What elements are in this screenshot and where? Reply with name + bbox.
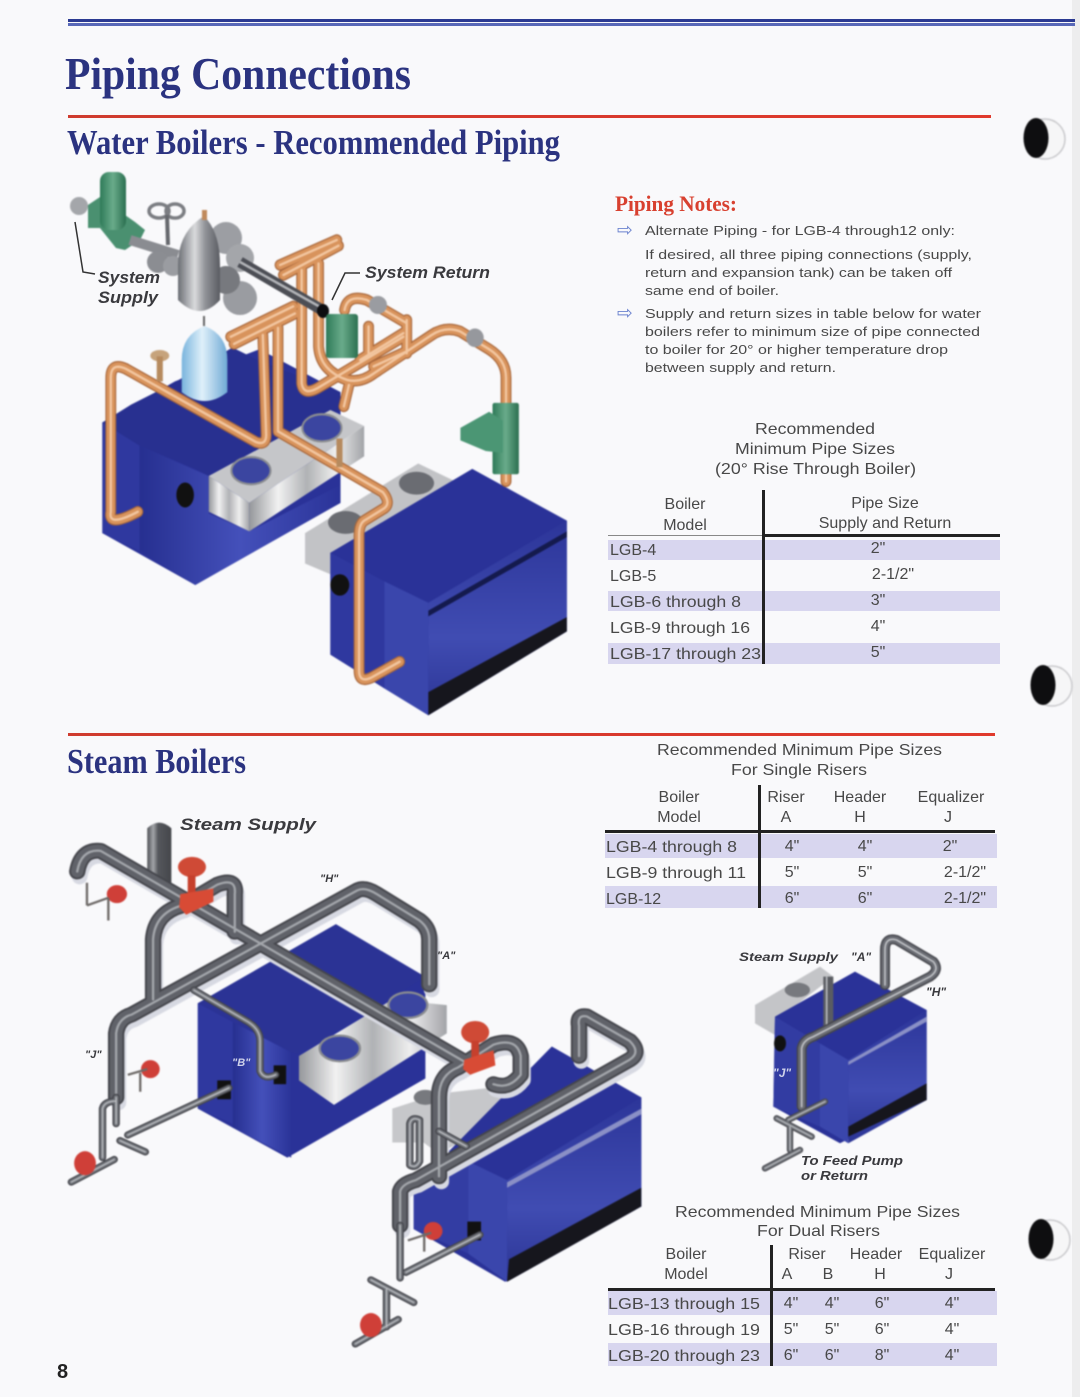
label: H small: "H" xyxy=(926,985,946,999)
table: dual risers: 6" xyxy=(825,1347,839,1364)
note 2: ⇨ xyxy=(617,302,633,324)
table: dual risers: 4" xyxy=(784,1295,798,1312)
table: dual risers: LGB-13 through 15 xyxy=(608,1296,760,1313)
table: single risers: LGB-4 through 8 xyxy=(606,839,737,856)
table: single risers: LGB-12 xyxy=(606,891,661,908)
table: water boilers pipe sizes: 5" xyxy=(871,644,885,661)
label: to feed pump: or Return xyxy=(801,1169,868,1183)
boiler 1 xyxy=(102,347,341,585)
red valve 2 xyxy=(461,1021,495,1075)
table: single risers: 4" xyxy=(858,838,872,855)
table: water boilers pipe sizes: LGB-9 through 16 xyxy=(610,620,750,637)
table: single risers: Riser xyxy=(767,789,805,806)
silver block xyxy=(755,967,833,1035)
red controls xyxy=(74,883,443,1337)
table: water boilers pipe sizes: 2-1/2" xyxy=(872,566,914,583)
table: single risers: 6" xyxy=(785,890,799,907)
table: water boilers pipe sizes: Recommended xyxy=(755,421,875,438)
note 1: If desired, all three piping connections (supply, xyxy=(645,247,972,262)
table: water boilers pipe sizes: Pipe Size xyxy=(851,495,919,512)
callout: system return: System Return xyxy=(365,263,490,282)
table: dual risers: LGB-20 through 23 xyxy=(608,1348,760,1365)
supply side fittings xyxy=(130,204,184,276)
table: dual risers: 6" xyxy=(784,1347,798,1364)
boiler B xyxy=(392,1047,641,1282)
steel piping xyxy=(71,851,638,1344)
table: single risers: Model xyxy=(657,809,701,826)
table: single risers: Recommended Minimum Pipe Sizes xyxy=(657,742,942,759)
table: dual risers: 6" xyxy=(875,1295,889,1312)
table: dual risers: Model xyxy=(664,1266,708,1283)
pump: supply xyxy=(70,172,145,250)
expansion tank xyxy=(182,326,227,401)
label: steam supply: Steam Supply xyxy=(180,815,318,834)
label: to feed pump: To Feed Pump xyxy=(801,1154,903,1168)
table: dual risers: B xyxy=(823,1266,833,1283)
table: water boilers pipe sizes: Model xyxy=(663,517,707,534)
table: single risers: Header xyxy=(834,789,887,806)
boiler 2 xyxy=(305,464,567,715)
valves on copper xyxy=(150,329,484,467)
table: dual risers: 5" xyxy=(825,1321,839,1338)
air separator tank xyxy=(178,210,220,326)
table: dual risers: 4" xyxy=(945,1321,959,1338)
table: dual risers: 5" xyxy=(784,1321,798,1338)
table: water boilers pipe sizes: 4" xyxy=(871,618,885,635)
table: water boilers pipe sizes: Supply and Return xyxy=(819,515,951,532)
table: dual risers: 6" xyxy=(875,1321,889,1338)
callout: system return xyxy=(332,263,490,300)
table: dual risers: Header xyxy=(850,1246,903,1263)
stack xyxy=(147,823,171,890)
table: water boilers pipe sizes: LGB-17 through 23 xyxy=(610,646,761,663)
callout: system supply: System xyxy=(98,268,160,287)
binder hole 1 xyxy=(1024,118,1065,159)
label: J: "J" xyxy=(85,1049,102,1061)
note 1: same end of boiler. xyxy=(645,283,779,298)
note 2: to boiler for 20° or higher temperature drop xyxy=(645,342,948,357)
red valve 1 xyxy=(178,857,213,915)
binder hole 2 xyxy=(1030,665,1072,706)
page number: 8 xyxy=(57,1361,68,1383)
note 2: between supply and return. xyxy=(645,360,836,375)
table: single risers: 5" xyxy=(785,864,799,881)
boiler body xyxy=(773,972,927,1143)
red divider xyxy=(68,115,991,118)
page edge shading xyxy=(1072,0,1080,1397)
table: dual risers: 8" xyxy=(875,1347,889,1364)
label: steam supply small: Steam Supply xyxy=(739,950,840,964)
table: single risers: 2-1/2" xyxy=(944,890,986,907)
illustration: water boilers piping xyxy=(70,172,567,715)
table: single risers: Equalizer xyxy=(918,789,985,806)
table: single risers: 4" xyxy=(785,838,799,855)
note 1: return and expansion tank) can be taken off xyxy=(645,265,952,280)
table: single risers: H xyxy=(854,809,866,826)
table: single risers: For Single Risers xyxy=(731,762,867,779)
top blue rule xyxy=(68,19,1075,26)
table: dual risers: A xyxy=(782,1266,793,1283)
table: water boilers pipe sizes: LGB-5 xyxy=(610,568,656,585)
heading: steam boilers: Steam Boilers xyxy=(67,742,246,781)
table: dual risers: J xyxy=(945,1266,953,1283)
title: Piping Connections xyxy=(65,48,411,99)
piping xyxy=(765,939,936,1168)
table: water boilers pipe sizes xyxy=(608,421,1000,664)
heading: water boilers: Water Boilers - Recommended Piping xyxy=(67,123,560,162)
table: dual risers: For Dual Risers xyxy=(757,1223,880,1240)
silver block xyxy=(209,410,364,531)
table: single risers: A xyxy=(781,809,792,826)
note 2: Supply and return sizes in table below for water xyxy=(645,306,982,321)
label: H: "H" xyxy=(320,873,339,885)
illustration: single boiler riser xyxy=(755,939,936,1168)
table: water boilers pipe sizes: Boiler xyxy=(665,496,706,513)
boiler A xyxy=(198,924,447,1158)
callout: system supply: Supply xyxy=(98,288,160,307)
illustration: steam boilers piping xyxy=(71,823,641,1344)
table: water boilers pipe sizes: Minimum Pipe Sizes xyxy=(735,441,895,458)
table: dual risers: Equalizer xyxy=(919,1246,986,1263)
table: water boilers pipe sizes: 2" xyxy=(871,540,885,557)
table: single risers: Boiler xyxy=(659,789,700,806)
table: water boilers pipe sizes: (20° Rise Through Boiler) xyxy=(715,461,916,478)
table: single risers: LGB-9 through 11 xyxy=(606,865,746,882)
label: A: "A" xyxy=(437,950,456,962)
table: single risers: 5" xyxy=(858,864,872,881)
table: dual risers: 4" xyxy=(825,1295,839,1312)
table: dual risers xyxy=(608,1204,997,1366)
note 2 xyxy=(617,302,982,375)
table: single risers: J xyxy=(944,809,952,826)
table: dual risers: 4" xyxy=(945,1295,959,1312)
table: water boilers pipe sizes: 3" xyxy=(871,592,885,609)
table: dual risers: 4" xyxy=(945,1347,959,1364)
table: water boilers pipe sizes: LGB-6 through 8 xyxy=(610,594,741,611)
label: B: "B" xyxy=(232,1057,251,1069)
binder hole 3 xyxy=(1028,1219,1070,1260)
table: dual risers: LGB-16 through 19 xyxy=(608,1322,760,1339)
table: dual risers: Boiler xyxy=(666,1246,707,1263)
red divider xyxy=(68,733,995,736)
table: water boilers pipe sizes: LGB-4 xyxy=(610,542,656,559)
table: single risers xyxy=(605,742,997,908)
label: to feed pump xyxy=(801,1154,903,1183)
copper piping xyxy=(110,240,506,679)
heading: piping notes: Piping Notes: xyxy=(615,191,737,216)
note 2: boilers refer to minimum size of pipe connected xyxy=(645,324,980,339)
table: single risers: 2" xyxy=(943,838,957,855)
note 1: Alternate Piping - for LGB-4 through12 only: xyxy=(645,223,955,238)
label: J small: "J" xyxy=(773,1066,791,1080)
note 1 xyxy=(617,219,972,298)
pump: boiler 2 xyxy=(460,403,519,474)
return side fittings xyxy=(210,222,329,318)
note 1: ⇨ xyxy=(617,219,633,241)
table: single risers: 6" xyxy=(858,890,872,907)
table: dual risers: H xyxy=(874,1266,886,1283)
table: single risers: 2-1/2" xyxy=(944,864,986,881)
callout: system supply xyxy=(75,222,160,307)
table: dual risers: Riser xyxy=(788,1246,826,1263)
pump: return xyxy=(326,296,387,358)
label: A small: "A" xyxy=(851,950,871,964)
table: dual risers: Recommended Minimum Pipe Sizes xyxy=(675,1204,960,1221)
